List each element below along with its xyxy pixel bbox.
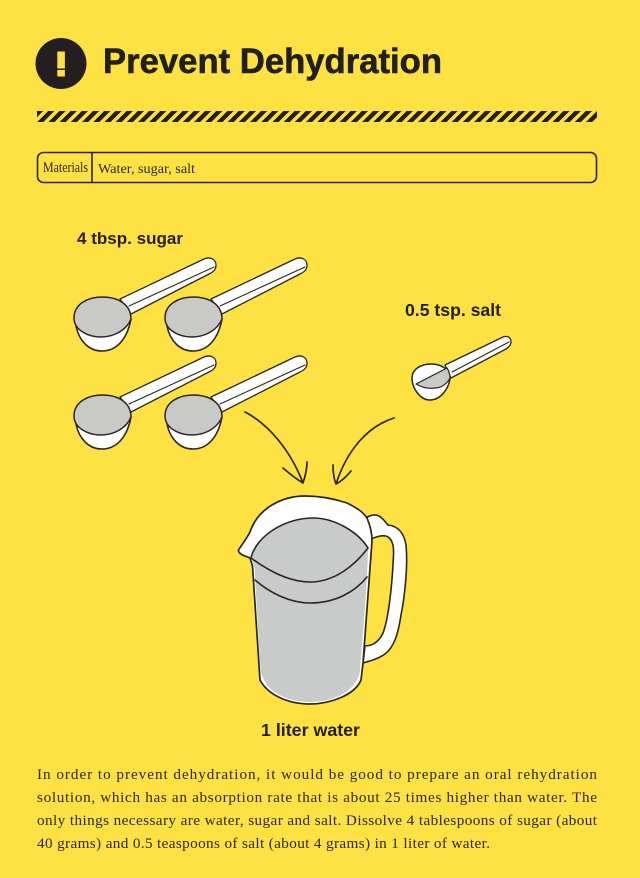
arrow: sugar into jug [245, 412, 307, 483]
label: sugar amount: 4 tbsp. sugar [77, 229, 183, 248]
body paragraph: In order to prevent dehydration, it would be good to prepare an oral rehydration [37, 766, 597, 783]
materials label: Materials [43, 160, 88, 176]
title: Prevent Dehydration [103, 42, 442, 81]
label: water amount: 1 liter water [261, 720, 360, 740]
body paragraph: 40 grams) and 0.5 teaspoons of salt (about 4 grams) in 1 liter of water. [37, 835, 490, 852]
body paragraph: solution, which has an absorption rate that is about 25 times higher than water. The [37, 789, 597, 806]
materials list: Water, sugar, salt [98, 162, 195, 177]
arrow: salt into jug [333, 418, 394, 484]
header [36, 38, 442, 89]
jug body [238, 496, 372, 704]
jug handle [363, 515, 407, 663]
body paragraph [37, 766, 598, 852]
hazard stripe divider [37, 111, 597, 122]
icon: exclamation badge [36, 38, 86, 89]
body paragraph: only things necessary are water, sugar and salt. Dissolve 4 tablespoons of sugar (about [37, 812, 598, 829]
water fill [251, 518, 368, 702]
icon: water jug [238, 496, 407, 704]
label: salt amount: 0.5 tsp. salt [405, 300, 501, 320]
materials bar [38, 152, 596, 182]
icon: half teaspoon of salt [412, 336, 511, 400]
icon: four sugar tablespoons [74, 258, 307, 449]
